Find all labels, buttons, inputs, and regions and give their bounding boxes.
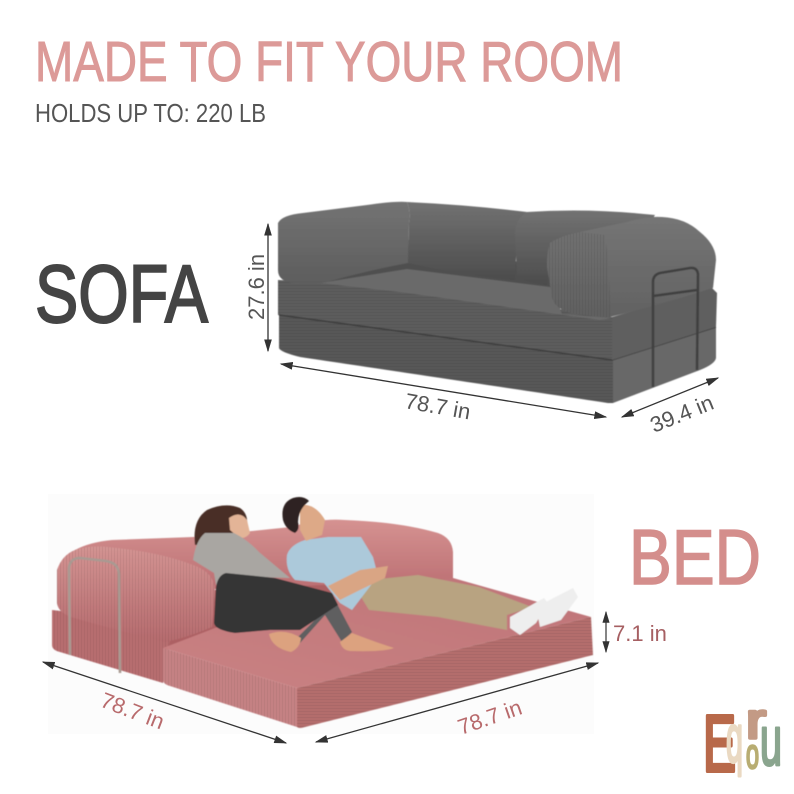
man: neck and face [300,505,325,541]
man: hair [282,497,309,533]
bed left base [52,610,170,683]
dimension: bed length right: 78.7 in [454,695,525,740]
dimension: mattress height [606,612,667,652]
dimension: bed length right [316,663,598,742]
dimension: mattress height: 7.1 in [613,621,667,646]
bed mattress top [163,578,591,688]
woman: feet [269,632,394,652]
woman: lower legs [295,600,352,643]
sofa shadow fill behind cushions [285,240,560,315]
brand logo: E [703,699,736,788]
sofa metal rail [653,268,698,387]
sofa right arm cushion [547,217,716,317]
sofa upper base front [278,280,612,360]
sofa lower base side [613,327,716,403]
bed metal rail [69,558,120,673]
sofa illustration [278,202,717,403]
heading: sofa: SOFA [35,249,208,340]
bed illustration with couple [52,497,593,728]
dimension: sofa height [244,224,269,351]
man: khaki trousers [361,575,532,630]
man: forearm and hands [328,566,388,600]
title: MADE TO FIT YOUR ROOM [35,30,623,94]
dimension: sofa depth: 39.4 in [647,390,717,438]
bed shadow fill behind cushions [150,578,453,650]
dimension: bed length left: 78.7 in [97,687,168,734]
brand logo: o [746,730,759,777]
sofa seat [320,269,612,320]
bed mattress left side [163,648,297,727]
brand logo: q [726,701,743,777]
dimension: bed length left [43,662,286,743]
brand logo [703,693,782,788]
sofa lower base front [279,315,613,403]
heading: bed: BED [629,513,761,601]
dimension: sofa length [281,364,606,424]
bed photo background [48,494,594,734]
dimension: sofa depth [622,378,718,438]
sofa upper base side [612,288,717,360]
woman: face [229,514,250,538]
dimension: sofa length: 78.7 in [403,388,473,424]
man: t-shirt [287,537,378,610]
woman: hair [194,505,247,545]
brand logo: r [746,693,766,749]
sofa seam between bases [279,315,716,360]
bed mattress front side [297,617,593,728]
sofa left arm cushion [278,202,410,284]
man: socks [510,588,578,635]
woman: sweater [193,533,290,585]
sofa back cushion right [515,211,655,285]
sofa back cushion left [407,202,527,280]
subtitle: weight capacity: HOLDS UP TO: 220 LB [35,98,266,128]
bed left arm cushion [57,546,215,642]
bed back cushions [75,520,453,590]
woman: trousers [214,573,338,633]
dimension: sofa height: 27.6 in [244,254,269,320]
